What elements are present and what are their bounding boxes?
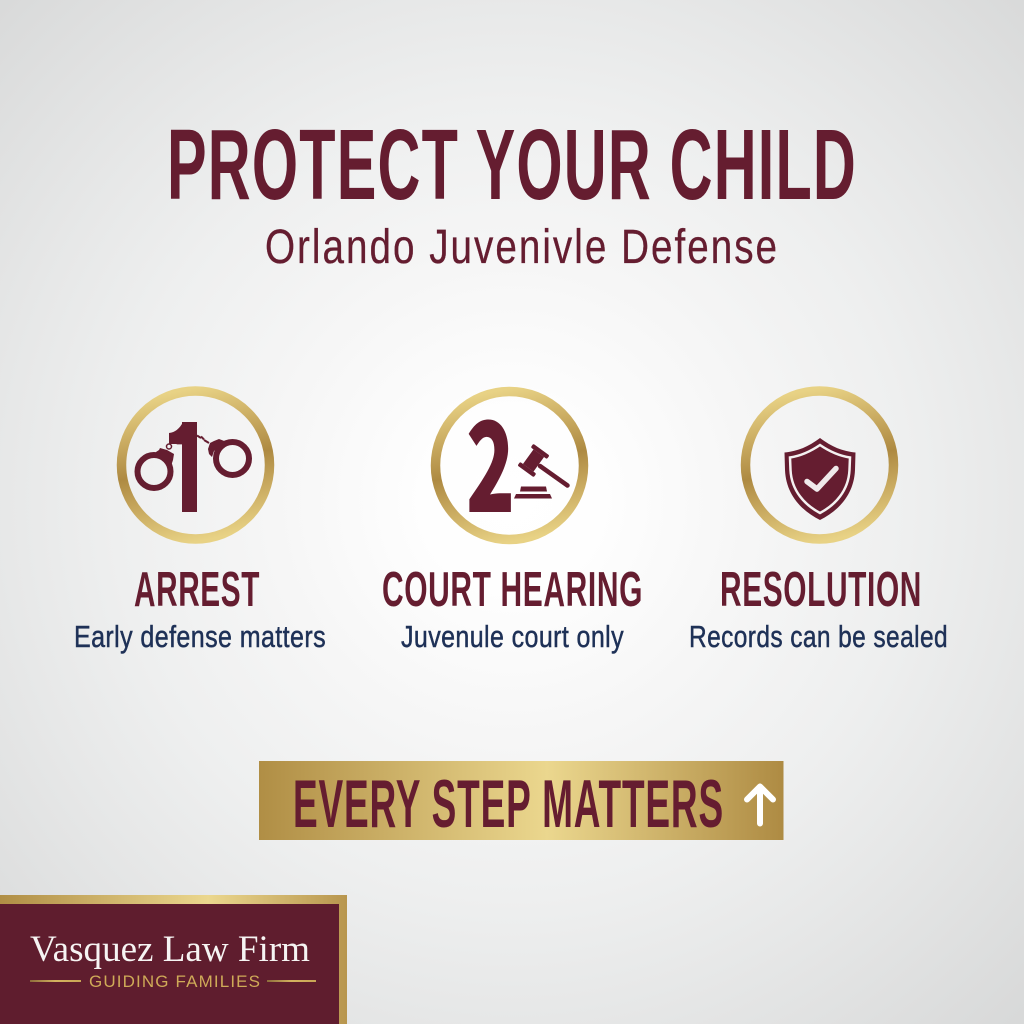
step 1: arrest (74, 370, 326, 654)
firm name: Vasquez Law Firm (30, 929, 310, 970)
tagline rule right (267, 980, 316, 982)
step 3: resolution (689, 391, 948, 654)
numeral 1 (169, 422, 197, 512)
icon: gold ring (746, 391, 894, 539)
step 2: court hearing (382, 367, 643, 654)
icon: gavel (514, 444, 568, 498)
heading: court hearing: COURT HEARING (382, 563, 643, 617)
caption: court: Juvenule court only (401, 619, 624, 654)
caption: resolution: Records can be sealed (689, 619, 948, 654)
heading: arrest: ARREST (134, 563, 260, 617)
subtitle: Orlando Juvenivle Defense (265, 221, 779, 274)
numeral 1: 1 (170, 370, 208, 548)
icon: shield with check (784, 438, 856, 520)
icon: gold ring (122, 391, 270, 539)
numeral 2: 2 (466, 367, 515, 548)
icon: handcuffs (138, 436, 249, 488)
tagline rule left (30, 980, 81, 982)
caption: arrest: Early defense matters (74, 619, 326, 654)
footer logo panel (0, 895, 347, 1024)
icon: gold ring (436, 392, 584, 540)
tagline: GUIDING FAMILIES (89, 972, 260, 991)
banner: every step matters (259, 761, 784, 842)
icon: up arrow (747, 786, 773, 824)
